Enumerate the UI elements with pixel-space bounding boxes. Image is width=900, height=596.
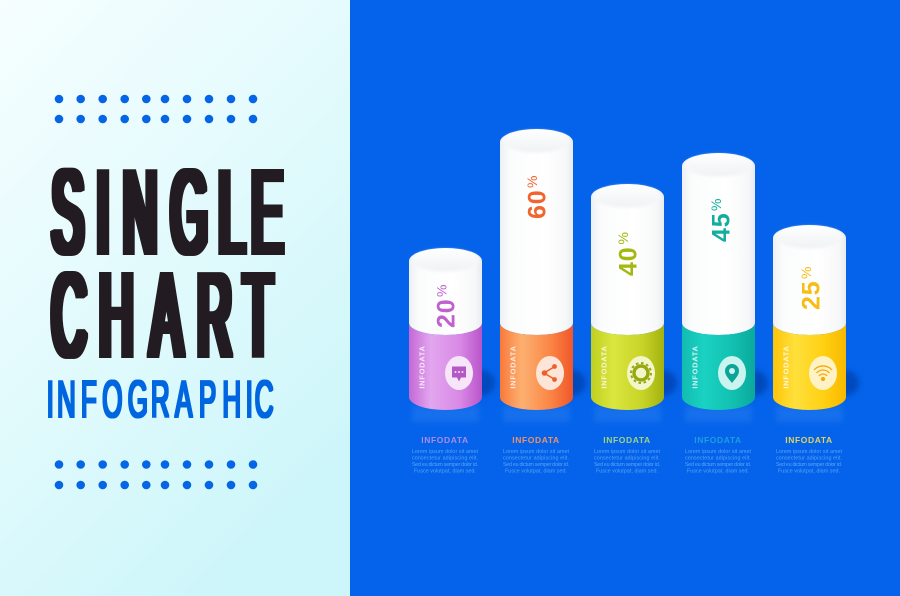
icon: share xyxy=(536,356,564,390)
caption: column 3: Lorem ipsum dolor sit amet xyxy=(594,449,661,455)
title: SINGLE: SINGLE xyxy=(52,147,283,279)
bar: 25 percent yellow cylinder: INFODATA xyxy=(782,345,790,389)
bar: 20 percent purple cylinder xyxy=(409,248,495,422)
bar: 20 percent purple cylinder: % xyxy=(434,285,450,297)
caption: column 3: Sed eu dictum semper dolor id. xyxy=(594,462,660,468)
bar: 45 percent teal cylinder: 45 xyxy=(708,213,736,242)
caption: column 3 xyxy=(594,435,661,474)
caption: column 1: Sed eu dictum semper dolor id. xyxy=(412,462,478,468)
caption: column 4: Lorem ipsum dolor sit amet xyxy=(685,449,752,455)
icon: chat bubble xyxy=(445,356,473,390)
panel: right blue background xyxy=(350,0,900,596)
caption: column 2: INFODATA xyxy=(512,435,560,445)
caption: column 5: Lorem ipsum dolor sit amet xyxy=(776,449,843,455)
dots: top decoration xyxy=(55,95,257,123)
caption: column 5: Sed eu dictum semper dolor id. xyxy=(776,462,842,468)
caption: column 4 xyxy=(685,435,752,474)
caption: column 1: Lorem ipsum dolor sit amet xyxy=(412,449,479,455)
caption: column 1: Fusce volutpat, diam sed. xyxy=(414,468,476,474)
dots: bottom decoration xyxy=(55,460,257,489)
panel: left pale background xyxy=(0,0,350,596)
caption: column 3: consectetur adipiscing elit. xyxy=(594,456,660,462)
subtitle: INFOGRAPHIC: INFOGRAPHIC xyxy=(47,370,273,428)
caption: column 2: Fusce volutpat, diam sed. xyxy=(505,468,567,474)
caption: column 5: Fusce volutpat, diam sed. xyxy=(778,468,840,474)
bar: 40 percent green cylinder: % xyxy=(615,232,631,244)
bar: 45 percent teal cylinder xyxy=(682,153,768,422)
title: CHART: CHART xyxy=(52,250,273,382)
bar: 60 percent orange cylinder: 60 xyxy=(524,190,552,219)
caption: column 2 xyxy=(503,435,570,474)
icon: wifi xyxy=(809,356,837,390)
bar: 40 percent green cylinder: 40 xyxy=(614,247,642,276)
bar: 45 percent teal cylinder: % xyxy=(708,199,724,211)
bar: 40 percent green cylinder xyxy=(591,184,677,422)
caption: column 2: consectetur adipiscing elit. xyxy=(503,456,569,462)
bar: 25 percent yellow cylinder: 25 xyxy=(798,281,826,310)
caption: column 4: Fusce volutpat, diam sed. xyxy=(687,468,749,474)
bar: 40 percent green cylinder: INFODATA xyxy=(600,345,608,389)
caption: column 5: consectetur adipiscing elit. xyxy=(776,456,842,462)
bar: 25 percent yellow cylinder xyxy=(773,225,859,422)
caption: column 5: INFODATA xyxy=(785,435,833,445)
bar: 20 percent purple cylinder: 20 xyxy=(432,299,460,328)
caption: column 1: consectetur adipiscing elit. xyxy=(412,456,478,462)
bar: 25 percent yellow cylinder: % xyxy=(798,267,814,279)
bar: 20 percent purple cylinder: INFODATA xyxy=(418,345,426,389)
bar: 60 percent orange cylinder: % xyxy=(524,176,540,188)
caption: column 1: INFODATA xyxy=(421,435,469,445)
caption: column 3: INFODATA xyxy=(603,435,651,445)
caption: column 4: INFODATA xyxy=(694,435,742,445)
bar: 60 percent orange cylinder xyxy=(500,129,586,422)
caption: column 4: Sed eu dictum semper dolor id. xyxy=(685,462,751,468)
caption: column 1 xyxy=(412,435,479,474)
caption: column 2: Lorem ipsum dolor sit amet xyxy=(503,449,570,455)
caption: column 3: Fusce volutpat, diam sed. xyxy=(596,468,658,474)
bar: 60 percent orange cylinder: INFODATA xyxy=(508,345,518,389)
caption: column 2: Sed eu dictum semper dolor id. xyxy=(503,462,569,468)
caption: column 5 xyxy=(776,435,843,474)
icon: map pin xyxy=(718,356,746,390)
bar: 45 percent teal cylinder: INFODATA xyxy=(690,345,700,389)
caption: column 4: consectetur adipiscing elit. xyxy=(685,456,751,462)
icon: gear xyxy=(627,356,655,390)
